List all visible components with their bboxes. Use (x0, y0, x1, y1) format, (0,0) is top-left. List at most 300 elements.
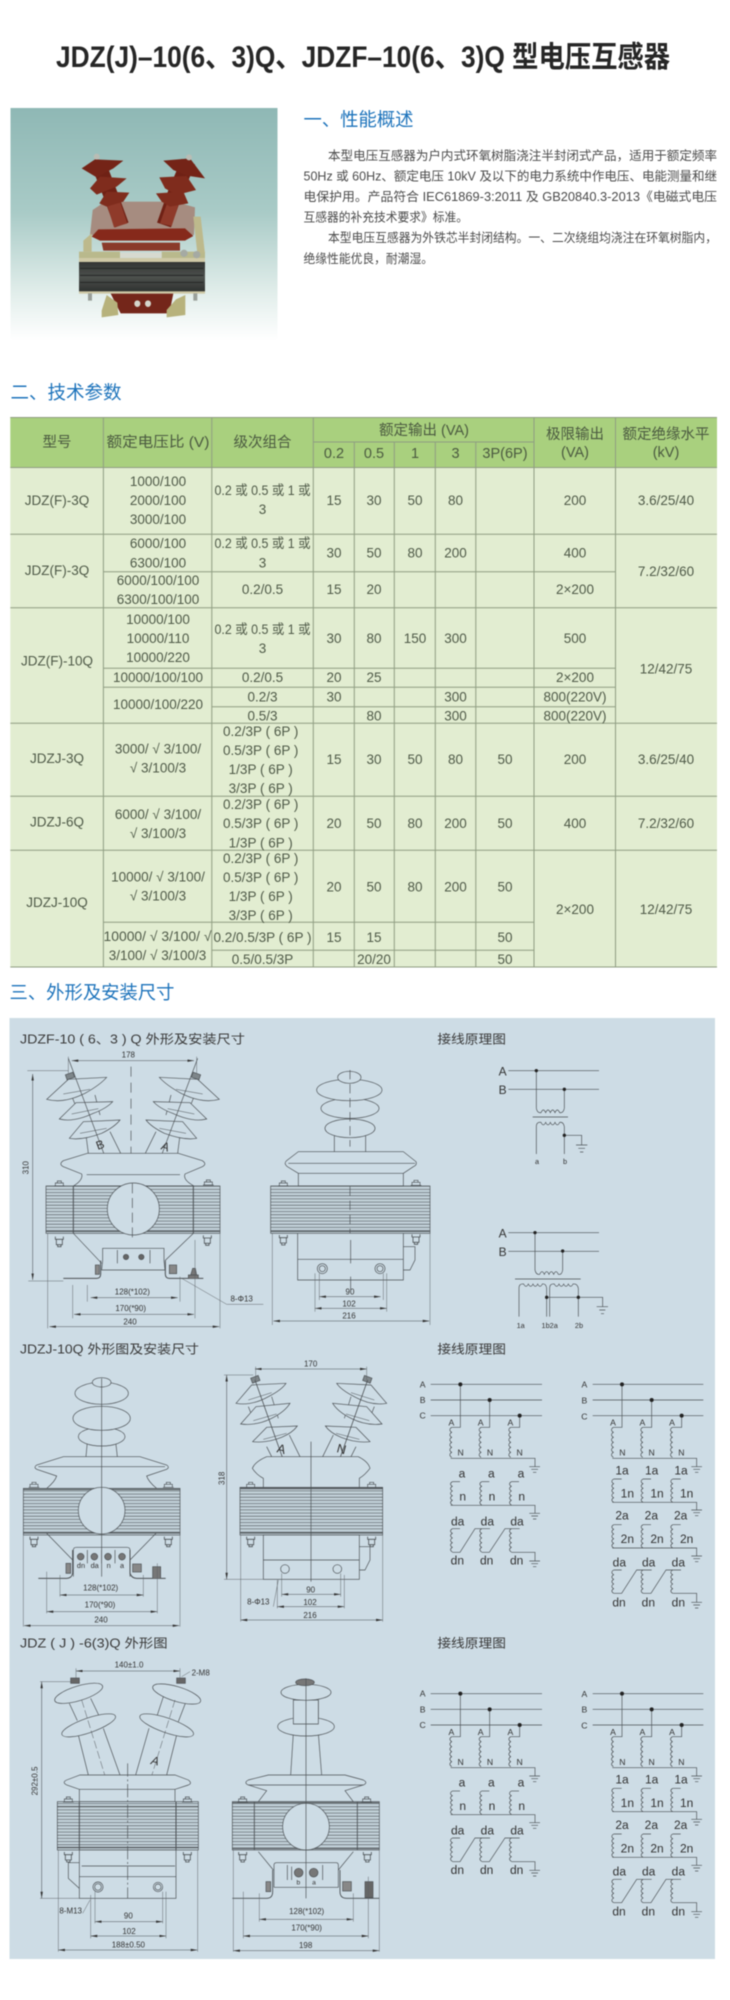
table: technical parameters (10, 417, 717, 967)
drawing: JDZJ-10Q front view: da (91, 1561, 100, 1570)
table row: JDZ(F)-10Q: 2×200 (556, 670, 594, 685)
table row: JDZJ-10Q: 3/3P ( 6P ) (229, 908, 293, 923)
table header: 额定输出 (VA) (379, 422, 469, 439)
table row: JDZ(F)-10Q: 0.2 或 0.5 或 1 或 (214, 622, 310, 637)
wiring diagram: three phase single: dn (480, 1863, 493, 1877)
table row: JDZ(F)-3Q 6000: JDZ(F)-3Q (25, 563, 89, 578)
wiring diagram: three phase double: da (672, 1865, 685, 1879)
table row: JDZ(F)-10Q: 300 (444, 631, 467, 646)
table row: JDZ(F)-3Q 1000-3000: 30 (366, 493, 382, 508)
wiring diagram: three phase single: N (487, 1757, 493, 1767)
wiring diagram: three phase single: a (459, 1776, 466, 1790)
table row: JDZJ-10Q: 15 (366, 930, 382, 945)
drawing group: JDZF-10 outline and wiring (20, 1032, 430, 1356)
wiring diagram: three phase double: 1n (621, 1487, 634, 1501)
wiring diagrams: JDZ(J)-6(3)Q (420, 1689, 703, 1919)
table row: JDZ(F)-3Q 1000-3000: 50 (407, 493, 423, 508)
table row: JDZJ-10Q: 1/3P ( 6P ) (229, 889, 293, 904)
wiring diagram: three phase double: 1n (680, 1487, 693, 1501)
wiring diagrams: JDZJ-10Q (420, 1379, 703, 1650)
table row: JDZ(F)-3Q 1000-3000: 15 (326, 493, 342, 508)
drawing: JDZF side view: 102 (342, 1299, 356, 1308)
wiring diagram: three phase single: A (478, 1727, 484, 1737)
wiring diagram: single secondary: a (535, 1157, 540, 1166)
dimensions: JDZF front view (21, 1050, 253, 1327)
table row: JDZ(F)-10Q: 10000/100 (126, 612, 190, 627)
table row: JDZ(F)-10Q: 800(220V) (543, 708, 607, 724)
wiring diagram: three phase double: dn (642, 1905, 655, 1919)
table row: JDZ(F)-10Q: 0.5/3 (247, 708, 278, 724)
table row: JDZJ-6Q: 6000/ √ 3/100/ (115, 807, 201, 822)
table row: JDZJ-6Q: 20 (326, 816, 342, 831)
wiring diagram: three phase double: 1a (645, 1773, 659, 1787)
wiring diagram: three phase single: A (478, 1418, 484, 1428)
drawing group: JDZ(J)-6(3)Q outline (30, 1661, 379, 1952)
table row: JDZJ-10Q: 20/20 (357, 952, 391, 967)
table header: 0.2 (324, 446, 344, 462)
wiring diagram: three phase double: 2a (674, 1509, 688, 1523)
table row: JDZ(F)-10Q: JDZ(F)-10Q (21, 654, 93, 668)
table row: JDZJ-10Q: 10000/ √ 3/100/ √ (104, 929, 212, 944)
wiring diagram: three phase single: C (420, 1411, 426, 1421)
text block: overview: 电保护用。产品符合 IEC61869-3:2011 及 GB20840.3-2013《电磁式电压 (304, 189, 717, 204)
wiring diagram: three phase single: da (510, 1824, 524, 1838)
wiring diagram: three phase single: N (517, 1757, 523, 1767)
wiring diagram: three phase double: da (672, 1555, 685, 1569)
wiring diagram: double secondary: 1a (517, 1321, 526, 1330)
wiring diagram: three phase double: 1a (674, 1463, 688, 1477)
label: JDZ(J)-6(3)Q outline: JDZ ( J ) -6(3)Q 外形图 (20, 1636, 168, 1650)
wiring diagram: three phase double: A (639, 1418, 645, 1428)
table row: JDZJ-6Q: 200 (444, 816, 467, 831)
drawing: JDZJ-10Q side view: 170 (304, 1360, 318, 1369)
table row: JDZ(F)-3Q 6000: 6000/100 (130, 536, 186, 551)
table row: JDZJ-10Q: 0.2/0.5/3P ( 6P ) (214, 930, 312, 945)
drawing: JDZJ-10Q side view: 318 (217, 1471, 226, 1485)
table row: JDZJ-10Q (26, 851, 692, 967)
drawing: JDZ(J)-6(3)Q front view: A (149, 1753, 160, 1769)
table row: JDZ(F)-3Q 6000: 80 (407, 546, 423, 560)
wiring diagram: three phase double: 2n (650, 1841, 664, 1855)
table row: JDZ(F)-3Q 1000-3000: 2000/100 (130, 493, 186, 508)
table row: JDZ(F)-10Q: 10000/220 (126, 650, 190, 665)
drawing group: JDZJ-10Q outline (20, 1360, 387, 1650)
table row: JDZ(F)-3Q 1000-3000: 3000/100 (130, 512, 186, 527)
wiring diagram: three phase single: dn (510, 1863, 523, 1877)
drawing: JDZ(J)-6(3)Q side view: 170(*90) (291, 1924, 322, 1933)
table row: JDZJ-10Q: 50 (497, 952, 513, 967)
table row: JDZJ-3Q: 3/3P ( 6P ) (229, 781, 293, 796)
dimensions: JDZF front view: 240 (123, 1318, 137, 1327)
table row: JDZJ-3Q: 3.6/25/40 (638, 752, 694, 767)
table row: JDZJ-3Q: 0.2/3P ( 6P ) (223, 724, 298, 739)
table row: JDZJ-10Q: JDZJ-10Q (26, 895, 88, 910)
wiring diagram: three phase double: A (669, 1418, 675, 1428)
table row: JDZ(F)-3Q 1000-3000: 80 (448, 493, 463, 508)
table row: JDZJ-6Q: 50 (497, 816, 513, 831)
wiring diagram: three phase single: dn (480, 1554, 493, 1568)
table row: JDZJ-10Q: 15 (326, 930, 342, 945)
drawing: JDZF side view (271, 1070, 430, 1325)
drawing: JDZ(J)-6(3)Q front view: 8-M13 (59, 1906, 83, 1915)
dimensions: JDZF front view: A (159, 1139, 172, 1155)
table row: JDZ(F)-10Q: 25 (366, 670, 382, 685)
wiring diagram: three phase single: dn (451, 1863, 464, 1877)
wiring diagram: double secondary: B (499, 1245, 507, 1259)
heading: section three: 三、外形及安装尺寸 (10, 982, 174, 1003)
table header: 3P(6P) (482, 446, 528, 462)
drawing: JDZJ-10Q side view: A (276, 1441, 288, 1457)
table header: 额定电压比 (V) (106, 434, 210, 451)
wiring diagram: three phase double: A (581, 1380, 587, 1390)
table row: JDZJ-6Q: JDZJ-6Q (30, 814, 84, 830)
wiring diagram: three phase double: da (642, 1555, 656, 1569)
table header: 级次组合 (234, 434, 292, 451)
wiring diagram: three phase double: dn (672, 1905, 685, 1919)
wiring diagram: three phase double: dn (672, 1595, 685, 1609)
wiring diagram: three phase single: A (420, 1379, 426, 1389)
wiring diagram: three phase double: 1n (650, 1487, 664, 1501)
wiring diagram: three phase double: N (678, 1448, 684, 1458)
table row: JDZJ-10Q: 50 (366, 880, 382, 894)
table row: JDZJ-3Q (30, 724, 694, 796)
table row: JDZ(F)-3Q 6000: 2×200 (556, 582, 594, 597)
table row: JDZJ-3Q: 0.5/3P ( 6P ) (223, 743, 298, 758)
drawing: JDZJ-10Q side view: N (335, 1441, 348, 1457)
table row: JDZ(F)-3Q 6000: 0.2/0.5 (242, 582, 283, 597)
label: wiring diagram 3: 接线原理图 (437, 1635, 506, 1650)
table row: JDZ(F)-10Q: 12/42/75 (640, 662, 692, 676)
table row: JDZ(F)-10Q: 300 (444, 690, 467, 704)
wiring diagram: three phase double: da (642, 1865, 656, 1879)
drawing: JDZ(J)-6(3)Q side view (232, 1678, 379, 1952)
table header: 3 (451, 446, 460, 462)
table row: JDZ(F)-10Q: 30 (326, 631, 342, 646)
table row: JDZJ-3Q: 1/3P ( 6P ) (229, 762, 293, 777)
table row: JDZ(F)-3Q 1000-3000 (25, 474, 694, 527)
table row: JDZJ-3Q: √ 3/100/3 (130, 760, 186, 776)
wiring diagram: three phase single: da (451, 1514, 465, 1528)
drawing: JDZF side view: 216 (342, 1312, 356, 1321)
label: wiring diagram 1: 接线原理图 (437, 1032, 506, 1047)
table row: JDZJ-10Q: 20 (326, 880, 342, 894)
drawing: JDZJ-10Q front view: dn (77, 1561, 85, 1570)
wiring diagram: three phase double: 1n (680, 1796, 693, 1810)
table header: 1 (411, 446, 419, 462)
table row: JDZJ-6Q: 50 (366, 816, 382, 831)
table row: JDZ(F)-3Q 6000: 20 (366, 582, 382, 597)
table header: 0.5 (364, 446, 384, 462)
wiring diagram: single secondary: B (499, 1083, 507, 1097)
title: JDZ(J)–10(6、3)Q、JDZF–10(6、3)Q 型电压互感器 (56, 41, 670, 74)
drawing: JDZ(J)-6(3)Q front view: 140±1.0 (115, 1661, 144, 1670)
panel: outline and installation drawings (10, 1018, 715, 1959)
table header: 极限输出 (546, 426, 604, 443)
table row: JDZ(F)-10Q: 10000/100/100 (113, 670, 203, 685)
dimensions: JDZF front view: 310 (21, 1160, 30, 1174)
table row: JDZ(F)-3Q 6000: 50 (366, 546, 382, 560)
wiring diagram: three phase single: n (518, 1799, 525, 1813)
table row: JDZ(F)-3Q 6000: 3 (259, 556, 266, 570)
drawing: JDZJ-10Q front view: 240 (94, 1616, 108, 1625)
wiring diagram: three phase double: 2a (645, 1509, 658, 1523)
table row: JDZJ-10Q: 0.5/0.5/3P (232, 952, 293, 967)
table row: JDZ(F)-10Q: 20 (326, 670, 342, 685)
wiring diagram: three phase double: A (610, 1418, 616, 1428)
wiring diagram: three phase double: 2a (674, 1818, 688, 1832)
table row: JDZ(F)-3Q 1000-3000: 200 (564, 493, 586, 508)
table row: JDZJ-3Q: 3000/ √ 3/100/ (115, 742, 201, 756)
table row: JDZ(F)-3Q 6000 (25, 536, 694, 607)
wiring diagram: three phase single: N (517, 1448, 523, 1458)
table row: JDZJ-6Q: √ 3/100/3 (130, 826, 186, 841)
table row: JDZJ-10Q: 3/100/ √ 3/100/3 (109, 948, 206, 963)
wiring diagram: three phase double: N (649, 1448, 655, 1458)
label: JDZF outline: JDZF-10 ( 6、3 ) Q 外形及安装尺寸 (20, 1032, 245, 1046)
drawing: JDZJ-10Q front view (23, 1378, 180, 1627)
table row: JDZJ-3Q: 30 (366, 752, 382, 767)
drawing: JDZJ-10Q side view: 102 (303, 1598, 317, 1607)
wiring diagram: three phase double: 2n (680, 1841, 693, 1855)
table row: JDZJ-10Q: 0.2/3P ( 6P ) (223, 851, 298, 866)
wiring diagram: three phase double: A (610, 1727, 616, 1737)
table header: (VA) (561, 445, 589, 461)
wiring diagram: three phase single: B (420, 1395, 426, 1405)
table row: JDZJ-10Q: 50 (497, 930, 513, 945)
table row: JDZ(F)-10Q: 30 (326, 690, 342, 704)
wiring diagram: three phase single: da (481, 1514, 494, 1528)
wiring diagram: three phase single: da (451, 1824, 465, 1838)
table row: JDZ(F)-3Q 1000-3000: JDZ(F)-3Q (25, 493, 89, 508)
drawing: JDZJ-10Q front view: a (120, 1561, 125, 1570)
wiring diagram: three phase double: 1a (674, 1773, 688, 1787)
table row: JDZJ-6Q (30, 797, 694, 850)
drawing: JDZ(J)-6(3)Q side view: 198 (299, 1941, 313, 1950)
wiring diagram: three phase double (581, 1689, 703, 1919)
table row: JDZ(F)-10Q: 80 (366, 708, 382, 724)
table row: JDZ(F)-10Q: 10000/100/220 (113, 697, 203, 712)
wiring diagram: three phase double: 1n (621, 1796, 634, 1810)
wiring diagram: three phase double: 2n (650, 1532, 664, 1546)
table row: JDZJ-3Q: 50 (407, 752, 423, 767)
wiring diagram: three phase double: C (581, 1721, 587, 1731)
wiring diagram: three phase single (420, 1379, 542, 1568)
wiring diagram: three phase double: 2n (621, 1532, 634, 1546)
table row: JDZ(F)-3Q 1000-3000: 1000/100 (130, 474, 186, 489)
table row: JDZJ-10Q: 80 (407, 880, 423, 894)
wiring diagram: double secondary: A (499, 1226, 507, 1240)
drawing: JDZ(J)-6(3)Q front view (30, 1661, 210, 1952)
wiring diagram: three phase single: A (448, 1418, 454, 1428)
drawing: JDZF front view (27, 1057, 263, 1328)
table header (42, 422, 710, 462)
table row: JDZJ-3Q: 50 (497, 752, 513, 767)
table header: 额定绝缘水平 (622, 426, 710, 443)
wiring diagram: three phase double: dn (612, 1905, 626, 1919)
drawing: JDZJ-10Q front view: 128(*102) (83, 1584, 119, 1593)
table row: JDZ(F)-10Q: 800(220V) (543, 690, 607, 704)
text block: overview: 本型电压互感器为外铁芯半封闭结构。一、二次绕组均浇注在环氧树脂内， (328, 230, 717, 245)
wiring diagram: three phase double: da (613, 1555, 626, 1569)
table row: JDZ(F)-10Q: 10000/110 (127, 631, 189, 646)
table header: 型号 (42, 434, 72, 451)
wiring diagram: three phase single: A (507, 1418, 513, 1428)
wiring diagram: three phase double: 1a (645, 1463, 659, 1477)
drawing: JDZ(J)-6(3)Q side view: 128(*102) (289, 1907, 325, 1916)
drawing: JDZ(J)-6(3)Q front view: 292±0.5 (30, 1766, 39, 1795)
table row: JDZJ-10Q: 12/42/75 (640, 902, 692, 917)
table row: JDZ(F)-3Q 6000: 6300/100/100 (117, 592, 199, 607)
wiring diagram: three phase double: dn (642, 1595, 655, 1609)
wiring diagram: three phase single: A (507, 1727, 513, 1737)
wiring diagram: three phase single: N (458, 1757, 464, 1767)
table row: JDZ(F)-3Q 6000: 6000/100/100 (117, 573, 199, 588)
table row: JDZ(F)-3Q 6000: 7.2/32/60 (638, 564, 694, 579)
drawing: JDZ(J)-6(3)Q front view: 188±0.50 (112, 1941, 146, 1950)
table row: JDZJ-3Q: 15 (326, 752, 342, 767)
table row: JDZ(F)-10Q: 3 (259, 641, 266, 656)
wiring diagram: single secondary: b (563, 1157, 567, 1166)
drawing: JDZJ-10Q side view: 216 (303, 1611, 317, 1620)
table row: JDZ(F)-10Q (21, 612, 692, 724)
table row: JDZJ-10Q: 50 (497, 880, 513, 894)
wiring diagram: three phase double: dn (612, 1595, 626, 1609)
wiring diagram: three phase single: B (420, 1704, 426, 1714)
wiring diagram: three phase double: 2n (680, 1532, 693, 1546)
wiring diagram: three phase double: 1n (650, 1796, 664, 1810)
wiring diagram: three phase single: n (459, 1799, 466, 1813)
table row: JDZ(F)-3Q 6000: 6300/100 (130, 556, 186, 570)
wiring diagram: double secondary: 2b (575, 1321, 583, 1330)
wiring diagram: three phase double: 2a (645, 1818, 658, 1832)
wiring diagram: three phase single: n (459, 1490, 466, 1504)
wiring diagram: three phase single: A (420, 1689, 426, 1699)
drawing: JDZ(J)-6(3)Q side view: b (296, 1879, 300, 1886)
table row: JDZJ-10Q: 10000/ √ 3/100/ (111, 870, 205, 884)
wiring diagram: three phase double (581, 1380, 703, 1609)
table row: JDZJ-3Q: 80 (448, 752, 463, 767)
wiring diagram: three phase single: n (518, 1490, 525, 1504)
drawing: JDZ(J)-6(3)Q front view: 90 (124, 1911, 133, 1920)
text block: overview: 互感器的补充技术要求》标准。 (304, 210, 468, 224)
wiring diagram: single secondary (499, 1064, 599, 1166)
wiring diagram: three phase single: da (510, 1514, 524, 1528)
label: wiring diagram 2: 接线原理图 (437, 1342, 506, 1357)
wiring diagram: three phase double: 1a (615, 1773, 629, 1787)
table row: JDZJ-6Q: 0.5/3P ( 6P ) (223, 816, 298, 831)
table row: JDZ(F)-3Q 1000-3000: 3 (259, 502, 266, 517)
drawing: JDZJ-10Q side view: 90 (306, 1586, 316, 1595)
table row: JDZ(F)-10Q: 0.2/3 (247, 690, 278, 704)
wiring diagram: three phase single: N (487, 1448, 493, 1458)
table header: (kV) (653, 445, 679, 461)
text block: overview: 50Hz 或 60Hz、额定电压 10kV 及以下的电力系统中作电压、电能测量和继 (304, 168, 717, 184)
wiring diagram: three phase single: a (459, 1466, 466, 1480)
wiring diagram: three phase single: a (518, 1466, 525, 1480)
wiring diagram: three phase single: a (518, 1776, 525, 1790)
wiring diagram: three phase double: da (613, 1865, 626, 1879)
table row: JDZ(F)-3Q 6000: 30 (326, 546, 342, 560)
table row: JDZ(F)-10Q: 80 (366, 631, 382, 646)
table row: JDZ(F)-10Q: 0.2/0.5 (242, 670, 283, 685)
wiring diagram: three phase single: N (458, 1448, 464, 1458)
table row: JDZ(F)-3Q 1000-3000: 0.2 或 0.5 或 1 或 (214, 483, 310, 498)
dimensions: JDZF front view: 170(*90) (115, 1304, 146, 1313)
drawing: JDZ(J)-6(3)Q side view: a (312, 1879, 316, 1886)
table row: JDZJ-6Q: 80 (407, 816, 423, 831)
wiring diagram: three phase single: n (489, 1490, 495, 1504)
drawing: JDZJ-10Q side view: 8-Φ13 (247, 1598, 270, 1607)
wiring diagram: three phase double: N (678, 1757, 684, 1767)
heading: section two: 二、技术参数 (10, 382, 122, 403)
wiring diagram: double secondary: 1b2a (542, 1321, 559, 1330)
wiring diagram: double secondary (499, 1226, 608, 1330)
drawing group: JDZF wiring diagrams (437, 1032, 608, 1357)
table row: JDZJ-10Q: √ 3/100/3 (130, 888, 186, 904)
wiring diagram: three phase single: a (488, 1776, 495, 1790)
table row: JDZ(F)-3Q 1000-3000: 3.6/25/40 (638, 493, 694, 508)
table row: JDZJ-10Q: 0.5/3P ( 6P ) (223, 870, 298, 885)
wiring diagram: three phase single: A (448, 1727, 454, 1737)
drawing: JDZJ-10Q front view: n (107, 1561, 111, 1570)
table row: JDZJ-10Q: 200 (444, 880, 467, 894)
table row: JDZJ-6Q: 400 (564, 816, 586, 831)
wiring diagram: three phase double: A (581, 1689, 587, 1699)
wiring diagram: three phase double: N (649, 1757, 655, 1767)
wiring diagram: three phase double: A (669, 1727, 675, 1737)
drawing: JDZJ-10Q front view: 170(*90) (85, 1601, 116, 1610)
table row: JDZ(F)-3Q 6000: 400 (564, 546, 586, 560)
wiring diagram: three phase single: dn (451, 1554, 464, 1568)
table row: JDZ(F)-10Q: 150 (404, 631, 426, 646)
table row: JDZ(F)-3Q 6000: 15 (326, 582, 342, 597)
wiring diagram: three phase double: B (581, 1395, 587, 1405)
wiring diagram: three phase double: 2n (621, 1841, 634, 1855)
dimensions: JDZF front view: 178 (122, 1050, 136, 1059)
wiring diagram: three phase double: 2a (615, 1509, 629, 1523)
wiring diagram: three phase double: N (619, 1757, 625, 1767)
wiring diagram: three phase single: a (488, 1466, 495, 1480)
wiring diagram: three phase single: C (420, 1720, 426, 1730)
table row: JDZ(F)-3Q 6000: 0.2 或 0.5 或 1 或 (214, 536, 310, 551)
dimensions: JDZF front view: B (94, 1137, 106, 1153)
dimensions: JDZF front view: 8-Φ13 (230, 1294, 253, 1303)
drawing: JDZ(J)-6(3)Q front view: 102 (122, 1927, 136, 1936)
table row: JDZJ-3Q: 200 (564, 752, 586, 767)
wiring diagram: three phase single: n (489, 1799, 495, 1813)
wiring diagram: three phase double: N (619, 1448, 625, 1458)
table row: JDZ(F)-10Q: 300 (444, 708, 467, 724)
wiring diagram: three phase double: C (581, 1411, 587, 1421)
text block: overview: 绝缘性能优良，耐潮湿。 (304, 251, 433, 266)
table row: JDZJ-6Q: 7.2/32/60 (638, 816, 694, 831)
wiring diagram: three phase double: B (581, 1705, 587, 1715)
wiring diagram: three phase double: 1a (615, 1463, 629, 1477)
wiring diagram: three phase single: dn (510, 1554, 523, 1568)
table row: JDZJ-6Q: 0.2/3P ( 6P ) (223, 797, 298, 812)
dimensions: JDZF front view: 128(*102) (115, 1288, 150, 1297)
wiring diagram: three phase single: da (481, 1824, 494, 1838)
table row: JDZ(F)-3Q 6000: 200 (444, 546, 467, 560)
table row: JDZ(F)-10Q: 500 (564, 631, 586, 646)
table row: JDZJ-3Q: JDZJ-3Q (30, 751, 84, 766)
heading: section one: 一、性能概述 (304, 109, 414, 130)
text block: overview: 本型电压互感器为户内式环氧树脂浇注半封闭式产品，适用于额定频率 (328, 148, 717, 163)
drawing: JDZ(J)-6(3)Q front view: 2-M8 (192, 1669, 210, 1678)
product photo: transformer (10, 108, 278, 340)
wiring diagram: single secondary: A (499, 1064, 507, 1078)
wiring diagram: three phase double: A (639, 1727, 645, 1737)
